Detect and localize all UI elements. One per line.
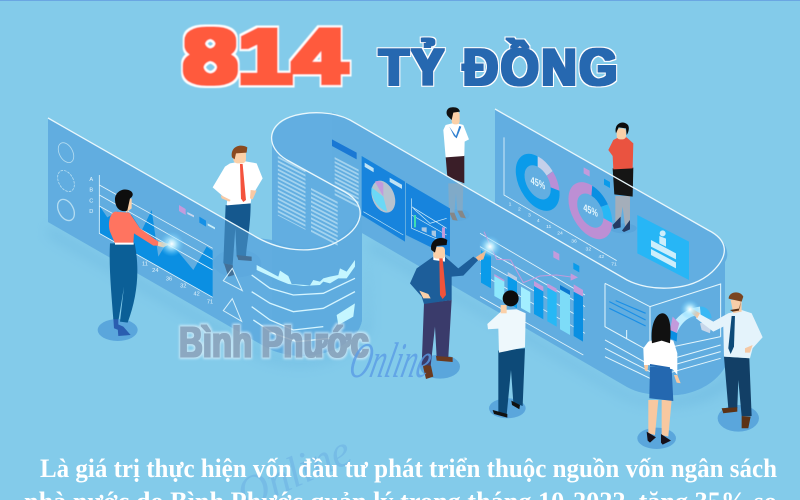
donut label: 45% — [583, 203, 598, 220]
donut 45% purple — [566, 169, 615, 253]
axis numbers: 2 — [518, 207, 521, 213]
profile card — [637, 215, 689, 280]
cylinder step charts — [257, 260, 355, 286]
title: 814: 814 — [183, 14, 347, 100]
panel: isometric S-shaped screen — [48, 109, 727, 395]
axis numbers: 11 — [546, 224, 551, 230]
axis letters: B — [89, 188, 93, 194]
dashboard header strip — [332, 139, 357, 159]
trend arrow — [484, 232, 578, 283]
dashboard: line and bar card — [406, 183, 450, 257]
axis letters: 32 — [180, 284, 186, 290]
body text — [24, 454, 778, 500]
axis letters: 36 — [166, 276, 172, 282]
axis letters: 11 — [142, 262, 148, 268]
axis letters: 71 — [207, 299, 213, 305]
watermark: Bình Phước: Bình Phước — [179, 318, 369, 367]
axis numbers: 36 — [571, 239, 577, 245]
figure: man in blue jacket — [410, 235, 501, 379]
donut 45% blue — [513, 140, 562, 225]
axis numbers: 3 — [528, 213, 531, 219]
axis letters: C — [89, 198, 93, 204]
screen frame and text lines — [605, 283, 721, 378]
legend swatches — [584, 167, 590, 177]
figure: woman with glowing touch — [98, 190, 184, 341]
top border line — [0, 0, 800, 1]
body text: Là giá trị thực hiện vốn đầu tư phát triển thuộc nguồn vốn ngân sách — [40, 454, 778, 483]
axis numbers: 71 — [611, 261, 617, 267]
axis numbers: 42 — [599, 254, 604, 260]
bar chart gridlines — [480, 233, 585, 355]
axis numbers: 4 — [537, 218, 540, 224]
white S outline — [48, 109, 724, 288]
triangle outlines — [223, 268, 242, 321]
axis letters — [89, 177, 213, 305]
legend swatches — [179, 205, 215, 229]
translucent wall overlay — [48, 112, 725, 395]
panel: central dashboards — [332, 139, 450, 257]
cylinder text columns — [292, 163, 347, 240]
axis letters: D — [89, 209, 93, 215]
figure: bearded man — [680, 292, 763, 432]
area series — [99, 207, 213, 297]
donut label: 45% — [531, 175, 545, 193]
axis letters: A — [89, 177, 93, 183]
gauge chart — [670, 307, 712, 342]
watermark: Online: Online — [344, 333, 438, 388]
axis letters: 42 — [194, 292, 200, 298]
figure: woman in blue skirt — [637, 313, 681, 449]
axis and gridlines — [99, 175, 213, 297]
left panel circle icons — [54, 140, 78, 223]
floor shadow under panels — [48, 226, 735, 407]
axis numbers — [509, 201, 617, 267]
figure: man seen from behind — [487, 290, 526, 418]
axis numbers: 1 — [509, 201, 512, 207]
figure: woman in coral top — [608, 123, 637, 233]
chart: left area chart panel — [54, 140, 355, 342]
axis numbers: 24 — [557, 231, 563, 237]
axis letters: 24 — [152, 268, 158, 274]
panel: right bar chart and donuts — [480, 137, 721, 378]
figure: woman with arms crossed — [443, 107, 470, 221]
axis numbers: 32 — [586, 247, 591, 253]
bar series — [481, 250, 583, 342]
axes — [504, 137, 617, 261]
figure: man with red tie — [213, 146, 263, 277]
panel: lighter cylinder body — [272, 213, 362, 356]
title: TỶ ĐỒNG: TỶ ĐỒNG — [379, 38, 620, 97]
dashboard: pie chart card — [362, 156, 405, 242]
legend swatches — [553, 251, 559, 261]
